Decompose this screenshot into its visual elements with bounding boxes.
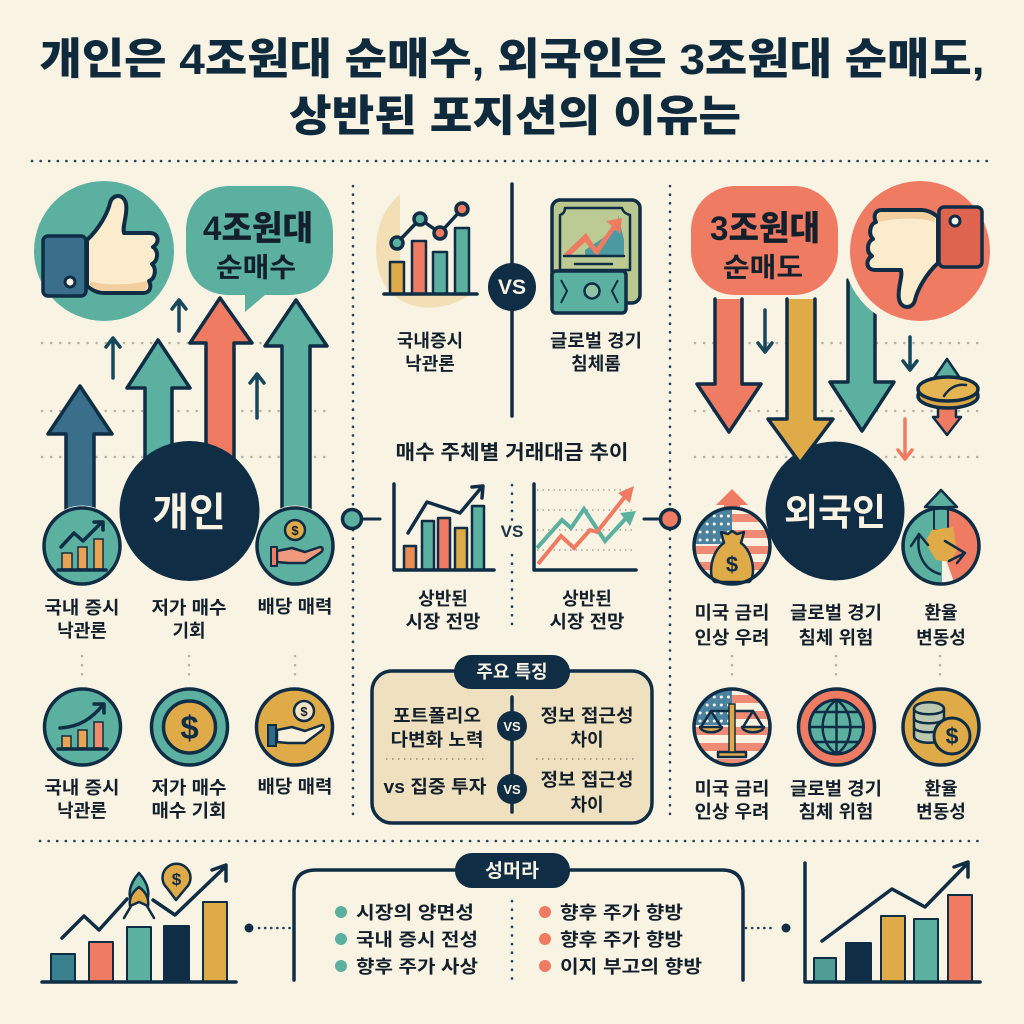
connector: left: [244, 924, 292, 932]
vs badge lower: [497, 774, 527, 804]
callout: 4조원대 순매수: 순매수: [216, 253, 296, 283]
icon: banknote with chart: [552, 200, 640, 313]
labels: row one: 미국 금리: [694, 603, 770, 623]
badge: 개인: 개인: [152, 491, 226, 535]
small arrow above flag: [716, 489, 748, 512]
panel: center comparison: [342, 184, 680, 823]
label: 글로벌 경기 침체롬: [550, 331, 642, 374]
label: 상반된 시장 전망 left: 시장 전망: [406, 612, 481, 632]
labels: row two: 변동성: [916, 802, 966, 822]
labels: row two: 저가 매수: [152, 778, 226, 798]
text: right features: 차이: [570, 730, 604, 750]
text: right features: 정보 접근성: [540, 770, 634, 790]
labels: row two: 미국 금리: [694, 779, 770, 799]
labels: row two: 매수 기회: [152, 801, 226, 821]
labels: row one: 글로벌 경기: [790, 603, 882, 623]
labels: row one: [694, 603, 966, 648]
icon: domestic stocks chart: [42, 506, 122, 586]
arrow: coral down: [697, 299, 761, 432]
small arrow above exchange icon: [925, 490, 957, 525]
panel: bottom summary: [42, 853, 980, 982]
list: right bullets: [539, 903, 702, 977]
icon: coins: $: [946, 723, 959, 749]
labels: row one: 변동성: [916, 628, 966, 648]
labels: row one: 낙관론: [57, 621, 107, 641]
labels: row two: [694, 779, 966, 822]
labels: row one: 배당 매력: [258, 597, 332, 617]
title: 개인은 4조원대 순매수, 외국인은 3조원대 순매도,: [40, 36, 985, 84]
icon: dollar coin: [152, 689, 228, 765]
labels: row two: 국내 증시: [44, 778, 120, 798]
icon: US flag scales: [692, 687, 772, 767]
icon: coins: [903, 689, 979, 765]
labels: row one: 인상 우려: [694, 628, 770, 648]
vs badge lower: VS: [503, 782, 521, 797]
vs divider: VS: [498, 276, 526, 299]
labels: row one: 침체 위험: [798, 628, 874, 648]
callout: 4조원대 순매수: 4조원대: [203, 210, 313, 248]
thumbs up badge: [34, 181, 174, 321]
text: left features: vs 집중 투자: [384, 777, 487, 797]
text: left features: 포트폴리오: [393, 706, 481, 726]
panel: foreign investors: [690, 174, 997, 822]
line chart: [534, 484, 636, 570]
chart icon: domestic optimism: [376, 194, 477, 308]
label: 상반된 시장 전망 right: [550, 589, 625, 632]
text: left features: 다변화 노력: [390, 730, 484, 750]
callout: 3조원대 순매도: 3조원대: [710, 210, 820, 248]
icon: US flag money bag: $: [726, 552, 738, 577]
labels: row two: 글로벌 경기: [790, 779, 882, 799]
label: 국내증시 낙관론: 낙관론: [405, 354, 455, 374]
labels: row one: 저가 매수: [152, 598, 226, 618]
label: 상반된 시장 전망 left: 상반된: [418, 589, 468, 609]
thumbs down badge: [843, 174, 997, 328]
labels: row one: 국내 증시: [44, 598, 120, 618]
label: 상반된 시장 전망 right: 시장 전망: [550, 612, 625, 632]
icon: exchange rate cycle: [901, 506, 981, 586]
label: 글로벌 경기 침체롬: 침체롬: [571, 354, 621, 374]
labels: row two: 환율: [924, 779, 958, 799]
arrow: teal up: [127, 340, 190, 480]
connector: right node: [644, 510, 680, 528]
text: right features: 정보 접근성: [540, 706, 634, 726]
badge: 외국인: 외국인: [784, 492, 886, 533]
small down arrows: [758, 310, 917, 370]
icon: US flag money bag: [692, 506, 772, 586]
text: right features: [540, 706, 634, 815]
title: 상반된 포지션의 이유는: [289, 93, 741, 141]
pill: 주요 특징: 주요 특징: [476, 662, 548, 682]
text: right features: 차이: [570, 795, 604, 815]
vs divider small: VS: [501, 522, 523, 541]
label: 상반된 시장 전망 right: 상반된: [562, 589, 612, 609]
panel: individual investors: [34, 181, 336, 821]
text: left features: [384, 706, 487, 797]
bar chart: [394, 484, 494, 570]
icon: rising chart: [44, 689, 120, 765]
arrow: gold down: [768, 299, 833, 463]
list: right bullets: 향후 주가 향방: [560, 903, 683, 923]
list: left bullets: 시장의 양면성: [356, 903, 474, 923]
badge: 외국인: [766, 442, 904, 580]
arrow: coral up: [190, 298, 252, 480]
arrow: blue up: [48, 386, 112, 510]
callout: 4조원대 순매수: [186, 186, 333, 312]
small coral arrow: [898, 419, 912, 459]
list: left bullets: [335, 903, 478, 977]
connector: right: [746, 924, 790, 932]
labels: row two: 침체 위험: [798, 802, 874, 822]
label: 글로벌 경기 침체롬: 글로벌 경기: [550, 331, 642, 351]
label: 국내증시 낙관론: 국내증시: [397, 331, 463, 351]
chart: right growth: [805, 862, 980, 982]
small up arrows: [106, 300, 264, 418]
icon: coin with arrows: [918, 359, 978, 435]
list: left bullets: 국내 증시 전성: [356, 930, 478, 950]
labels: row two: 낙관론: [57, 801, 107, 821]
label: 국내증시 낙관론: [397, 331, 463, 374]
arrow: tall teal up: [265, 300, 327, 510]
callout: 3조원대 순매도: [691, 186, 838, 295]
list: right bullets: 향후 주가 향방: [560, 930, 683, 950]
labels: row one: [44, 597, 332, 641]
badge: 개인: [120, 441, 260, 581]
labels: row two: 인상 우려: [694, 802, 770, 822]
pill: 성머라: [455, 853, 570, 888]
pill: 성머라: 성머라: [485, 860, 540, 882]
vs badge upper: VS: [503, 719, 521, 734]
list: left bullets: 향후 주가 사상: [356, 957, 478, 977]
list: right bullets: 이지 부고의 향방: [560, 957, 702, 977]
icon: globe: [798, 689, 874, 765]
labels: row one: 환율: [924, 603, 958, 623]
icon: dividend hand: [254, 506, 336, 586]
panel: key features: [372, 655, 652, 823]
labels: row two: [44, 777, 332, 821]
arrow: teal down: [830, 280, 894, 431]
pill: 주요 특징: [454, 655, 570, 689]
icon: gold dividend hand: [256, 689, 332, 765]
title: [40, 36, 985, 141]
labels: row one: 기회: [172, 621, 206, 641]
chart: rocket growth: $: [172, 870, 182, 889]
icon: dollar coin: $: [180, 709, 199, 746]
icon: gold dividend hand: $: [300, 704, 308, 719]
label: 상반된 시장 전망 left: [406, 589, 481, 632]
labels: row two: 배당 매력: [258, 777, 332, 797]
heading: trading value trend: 매수 주체별 거래대금 추이: [396, 441, 628, 464]
connector: left node: [342, 510, 380, 528]
icon: dividend hand: $: [291, 523, 299, 538]
callout: 3조원대 순매도: 순매도: [723, 253, 803, 283]
vs badge upper: [497, 711, 527, 741]
summary frame: [294, 870, 743, 980]
chart: rocket growth: [42, 864, 236, 982]
vs divider: [488, 184, 536, 416]
